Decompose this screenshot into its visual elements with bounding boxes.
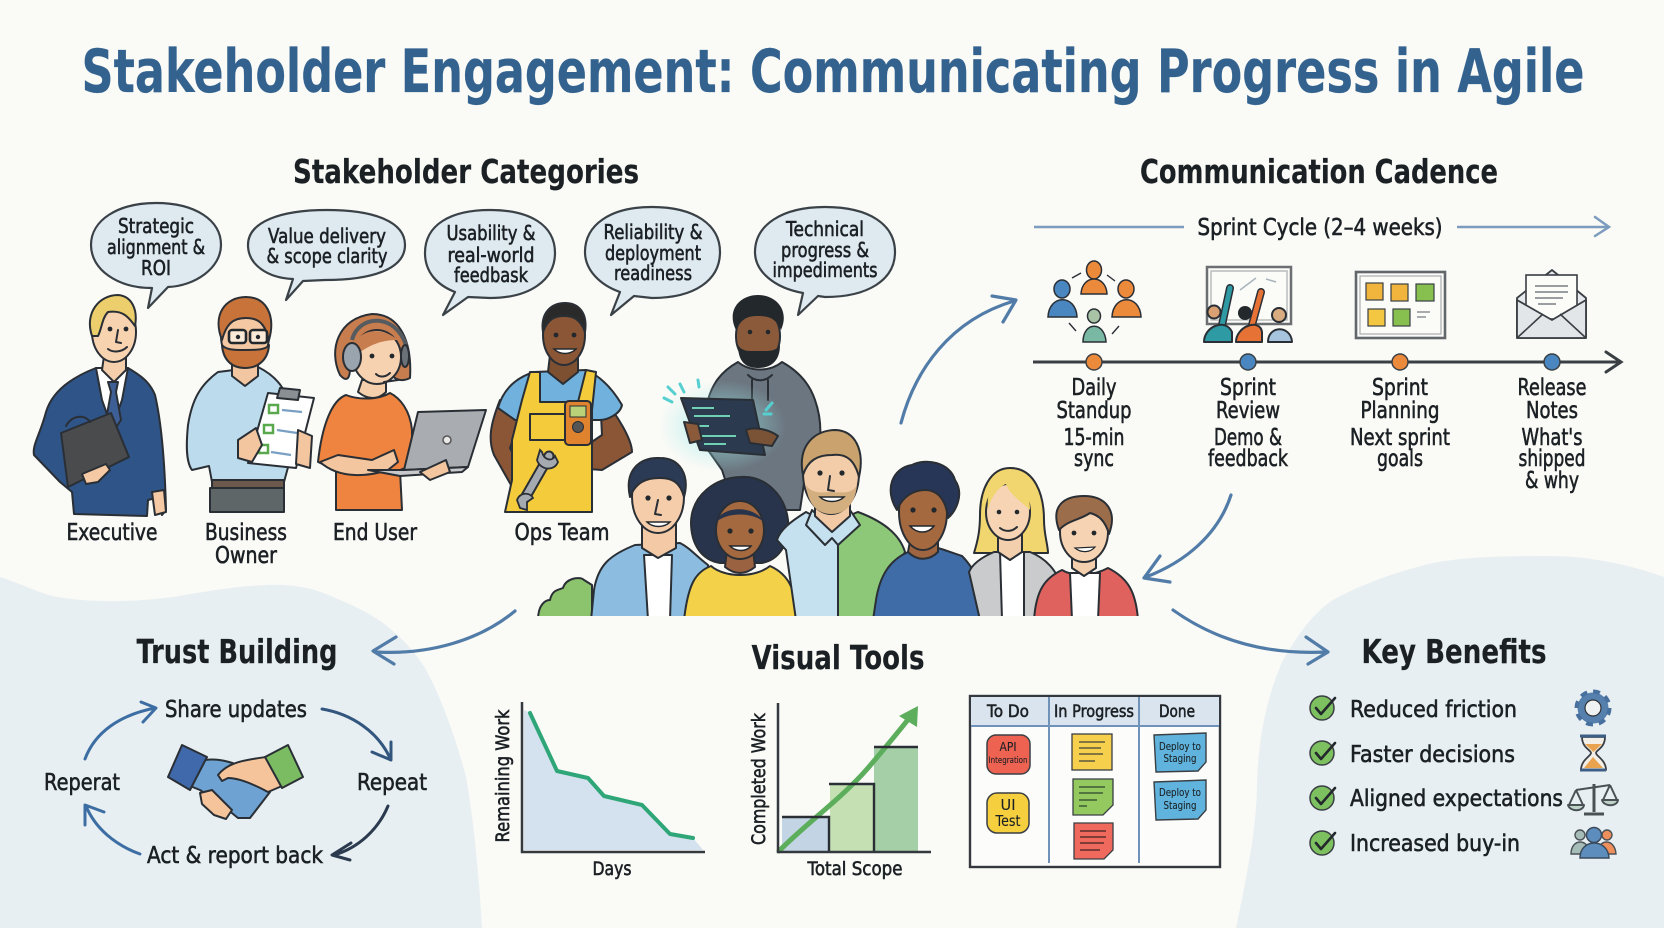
speech bubble: executive: Strategic xyxy=(118,214,194,238)
panel: stakeholder categories xyxy=(34,152,895,569)
card: deploy to staging 2: Staging xyxy=(1164,799,1196,812)
sprint cycle banner xyxy=(1034,215,1609,241)
chart: burnup: Total Scope xyxy=(807,858,902,880)
teammate: blonde woman in grey blazer xyxy=(969,468,1062,620)
cycle label: repeat left: Reperat xyxy=(44,770,120,796)
person: developer with glowing tablet xyxy=(658,295,820,510)
cadence item: sprint review: Review xyxy=(1216,398,1280,424)
kanban board: In Progress xyxy=(1054,702,1134,722)
card: deploy to staging 1: Staging xyxy=(1164,752,1196,765)
teammate: brown hair, red jacket xyxy=(1034,496,1138,620)
label: business owner xyxy=(205,520,287,569)
speech bubble: end user xyxy=(425,210,555,315)
label: business owner: Business xyxy=(205,520,287,546)
panel: visual tools xyxy=(492,638,1220,880)
speech bubble: developers: Technical xyxy=(785,217,864,241)
speech bubble: end user: feedbask xyxy=(454,263,528,287)
kanban board: To Do xyxy=(986,702,1029,722)
speech bubble: developers xyxy=(755,207,895,315)
card: API integration xyxy=(987,735,1030,774)
teammate: curly hair, blue sweater xyxy=(873,462,985,620)
teammate: bearded man, blue-green shirt xyxy=(777,430,905,620)
label: business owner: Owner xyxy=(215,543,277,569)
sticky note: green xyxy=(1073,779,1113,815)
team group xyxy=(530,430,1145,624)
cadence item: daily standup: Standup xyxy=(1056,398,1132,424)
cadence item: release notes xyxy=(1518,375,1586,494)
speech bubble: developers: impediments xyxy=(772,258,878,282)
arrow: team to key benefits xyxy=(1173,610,1328,664)
person: business owner xyxy=(187,297,314,512)
person: executive xyxy=(34,295,166,516)
chart: burndown: Days xyxy=(592,858,632,880)
card: deploy to staging 2: Deploy to xyxy=(1159,786,1201,799)
chart: burndown: Remaining Work xyxy=(492,710,514,842)
speech bubble: ops team: readiness xyxy=(614,261,692,285)
cadence item: release notes: Notes xyxy=(1526,398,1578,424)
speech bubble: executive xyxy=(91,203,221,308)
bush xyxy=(538,578,592,620)
icon: people group xyxy=(1571,828,1616,858)
icon: handshake xyxy=(168,745,303,819)
heading: key benefits: Key Benefits xyxy=(1362,632,1546,671)
cycle label: share updates: Share updates xyxy=(165,697,307,723)
speech bubble: business owner xyxy=(248,210,405,300)
label: executive: Executive xyxy=(66,520,158,546)
speech bubble: ops team: deployment xyxy=(605,241,701,265)
person: ops team xyxy=(491,303,632,512)
cadence item: release notes: Release xyxy=(1518,375,1586,401)
cycle label: act and report back: Act & report back xyxy=(147,843,324,869)
panel: trust building xyxy=(44,632,427,869)
speech bubble: ops team: Reliability & xyxy=(604,220,702,244)
icon: release notes envelope xyxy=(1517,270,1586,338)
kanban board: Done xyxy=(1159,702,1195,722)
heading: visual tools: Visual Tools xyxy=(752,638,924,677)
label: ops team: Ops Team xyxy=(514,520,610,546)
cadence item: daily standup xyxy=(1056,375,1132,472)
card: UI test xyxy=(987,793,1029,833)
label: end user: End User xyxy=(333,520,417,546)
cadence item: sprint review: Demo & xyxy=(1214,425,1282,451)
timeline xyxy=(1033,352,1621,372)
speech bubble: end user: Usability & xyxy=(446,221,536,245)
teammate: woman in yellow xyxy=(684,477,798,620)
cadence item: sprint review: feedback xyxy=(1208,446,1289,472)
benefit: increased buy-in: Increased buy-in xyxy=(1350,831,1520,857)
arrow: team to communication cadence xyxy=(901,296,1016,423)
card: UI test: UI xyxy=(1000,796,1016,814)
cadence item: sprint planning: Sprint xyxy=(1372,375,1428,401)
icon: sprint planning board xyxy=(1356,272,1445,338)
cadence item: sprint planning: Planning xyxy=(1360,398,1440,424)
cadence item: sprint planning: goals xyxy=(1377,446,1423,472)
speech bubble: developers: progress & xyxy=(781,238,869,262)
arrow: communication cadence to team xyxy=(1144,495,1231,582)
card: deploy to staging 1: Deploy to xyxy=(1159,740,1201,753)
card: deploy to staging 2 xyxy=(1154,780,1206,820)
cycle arrows xyxy=(85,702,391,860)
icon: daily standup people circle xyxy=(1048,261,1141,342)
heading: communication cadence: Communication Cadence xyxy=(1140,152,1498,191)
cadence item: daily standup: sync xyxy=(1074,446,1114,472)
heading: trust building: Trust Building xyxy=(136,632,338,671)
sticky note: red xyxy=(1074,823,1113,859)
benefit: aligned expectations: Aligned expectations xyxy=(1350,786,1563,812)
speech bubble: business owner: Value delivery xyxy=(268,224,386,248)
teammate: denim shirt xyxy=(591,458,708,620)
card: UI test: Test xyxy=(995,812,1021,830)
speech bubble: executive: ROI xyxy=(141,256,171,280)
cadence item: sprint planning xyxy=(1350,375,1450,472)
icon: sprint review whiteboard xyxy=(1204,267,1292,342)
cadence item: release notes: What's xyxy=(1522,425,1582,451)
cadence item: sprint planning: Next sprint xyxy=(1350,425,1450,451)
sticky note: yellow xyxy=(1072,734,1112,770)
cadence item: sprint review xyxy=(1208,375,1289,472)
chart: burnup: Completed Work xyxy=(748,713,770,845)
benefit: reduced friction: Reduced friction xyxy=(1350,697,1517,723)
speech bubble: ops team xyxy=(585,207,720,315)
person: end user xyxy=(318,314,486,510)
speech bubble: executive: alignment & xyxy=(107,235,205,259)
arrow: team to trust building xyxy=(373,611,515,664)
cadence item: release notes: & why xyxy=(1525,468,1579,494)
icon: gear xyxy=(1576,692,1610,724)
card: deploy to staging 1 xyxy=(1154,733,1206,772)
cadence item: daily standup: Daily xyxy=(1072,375,1116,401)
benefit: faster decisions: Faster decisions xyxy=(1350,742,1515,768)
sprint cycle banner: Sprint Cycle (2–4 weeks) xyxy=(1198,215,1442,241)
icon: hourglass xyxy=(1580,736,1606,770)
chart: burnup xyxy=(748,703,931,880)
panel: communication cadence xyxy=(1033,152,1621,494)
card: API integration: API xyxy=(1000,740,1016,754)
cadence item: release notes: shipped xyxy=(1518,446,1586,472)
kanban board xyxy=(970,696,1220,867)
speech bubble: business owner: & scope clarity xyxy=(266,244,388,268)
cadence item: sprint review: Sprint xyxy=(1220,375,1276,401)
panel: key benefits xyxy=(1310,632,1618,858)
chart: burndown xyxy=(492,702,705,880)
heading: stakeholder categories: Stakeholder Categories xyxy=(293,152,639,191)
icon: balance scale xyxy=(1568,784,1618,814)
cycle label: repeat right: Repeat xyxy=(357,770,427,796)
cadence item: daily standup: 15-min xyxy=(1064,425,1124,451)
card: API integration: Integration xyxy=(988,756,1028,766)
speech bubble: end user: real-world xyxy=(448,243,534,267)
